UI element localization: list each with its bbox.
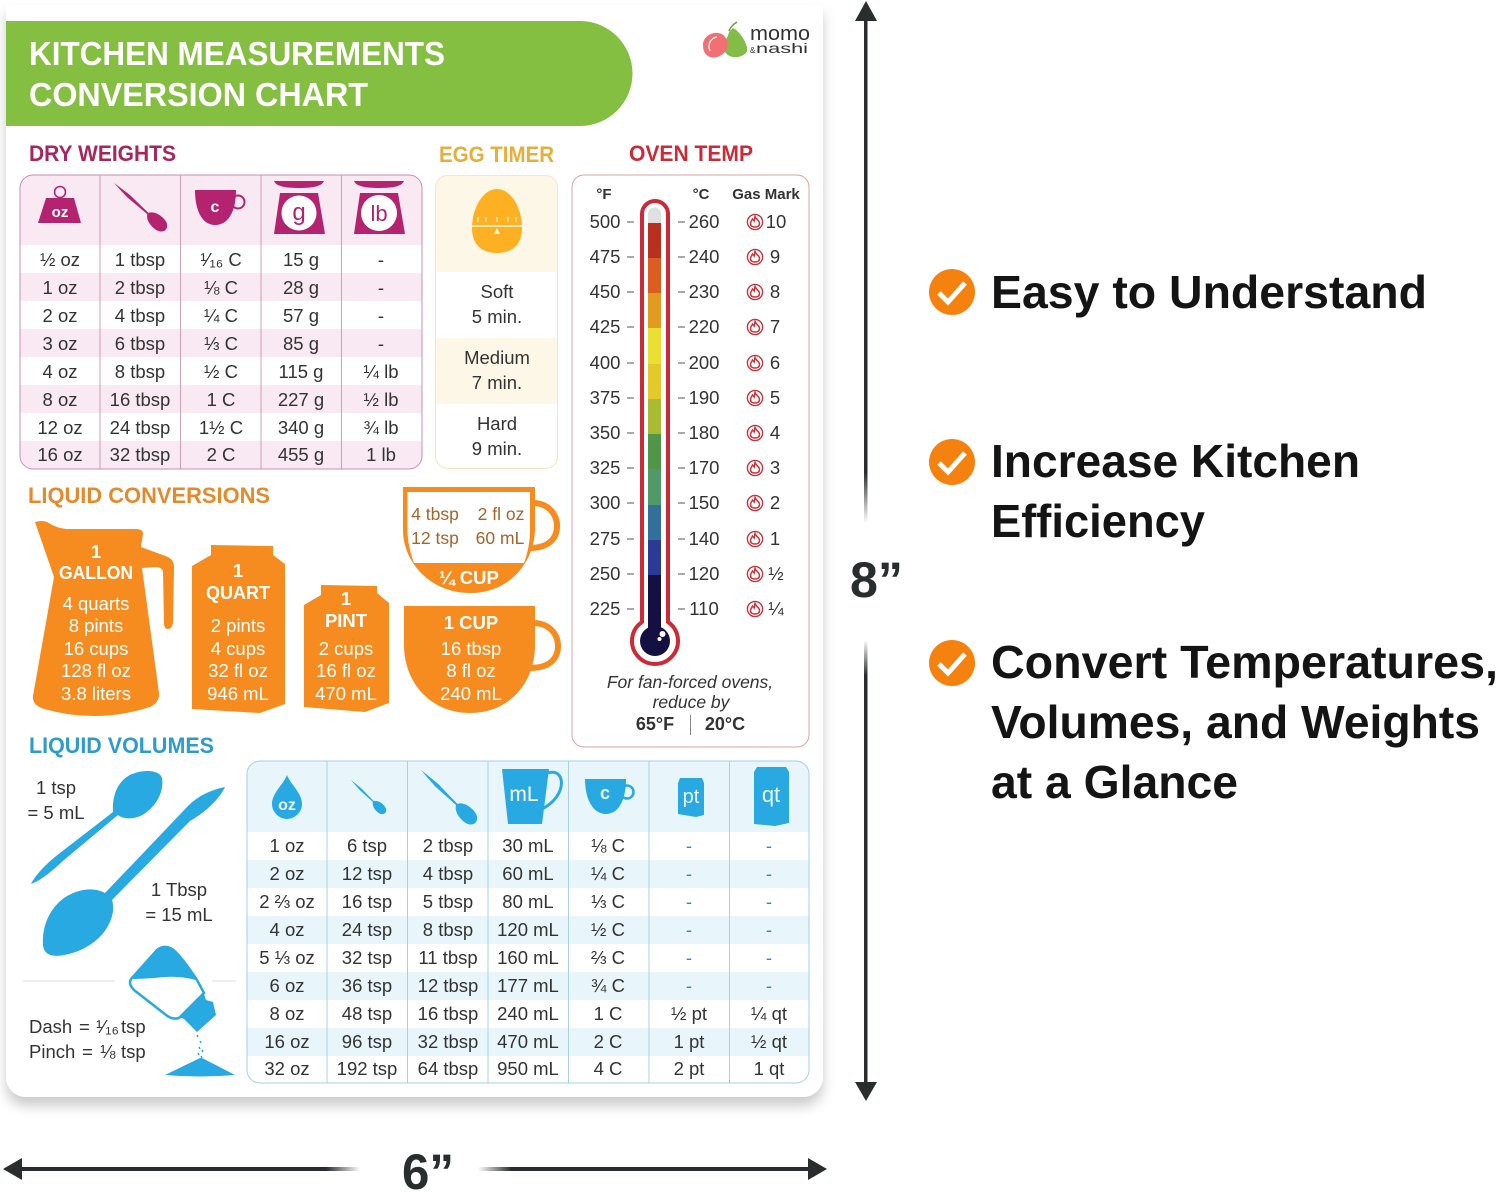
- dry weights values: -: [378, 249, 384, 270]
- gas mark values: ¼: [768, 598, 784, 619]
- carton: 1 pint: 16 fl oz: [316, 660, 376, 681]
- carton: 1 quart: QUART: [206, 582, 271, 603]
- dash and pinch labels: ¹⁄₁₆: [96, 1016, 119, 1037]
- carton: 1 quart: 4 cups: [211, 638, 265, 659]
- cup: 1 cup: 240 mL: [440, 683, 502, 704]
- liquid volumes values: 80 mL: [502, 891, 554, 912]
- dash and pinch labels: [29, 1016, 146, 1062]
- liquid volumes values: 177 mL: [497, 975, 559, 996]
- dry weights icons: lb: [370, 201, 388, 226]
- liquid volumes values: -: [686, 975, 692, 996]
- fan-forced note: reduce by: [653, 692, 731, 712]
- liquid volumes values: -: [766, 947, 772, 968]
- dry weights values: 8 oz: [43, 389, 77, 410]
- dash and pinch labels: =: [82, 1041, 93, 1062]
- carton: 1 quart: 946 mL: [207, 683, 269, 704]
- carton: 1 quart: [192, 545, 285, 713]
- celsius scale: 180: [689, 422, 719, 443]
- heading: liquid volumes: LIQUID VOLUMES: [29, 733, 214, 758]
- egg timer labels: Medium: [464, 347, 530, 368]
- jug: 1 gallon: [33, 521, 174, 716]
- gas mark values: 7: [770, 316, 780, 337]
- liquid volumes values: 2 C: [594, 1031, 622, 1052]
- gas mark values: 4: [770, 422, 780, 443]
- cup: quarter cup: 4 tbsp: [411, 504, 459, 524]
- fan-forced note: [607, 672, 773, 735]
- dry weights icons: [38, 178, 405, 235]
- gas mark values: 3: [770, 457, 780, 478]
- celsius scale: 170: [689, 457, 719, 478]
- liquid volumes values: 5 tbsp: [423, 891, 473, 912]
- gas mark values: 5: [770, 387, 780, 408]
- gas mark values: [766, 211, 786, 619]
- liquid volumes values: 4 C: [594, 1058, 622, 1079]
- liquid volumes values: 24 tsp: [342, 919, 392, 940]
- dry weights values: 24 tbsp: [110, 417, 170, 438]
- celsius scale: 220: [689, 316, 719, 337]
- title banner: [6, 21, 633, 126]
- liquid volumes values: 32 tbsp: [418, 1031, 478, 1052]
- liquid volumes values: 4 oz: [270, 919, 304, 940]
- cup: quarter cup: 2 fl oz: [478, 504, 524, 524]
- carton: 1 quart: 32 fl oz: [208, 660, 268, 681]
- liquid volumes values: 1 C: [594, 1003, 622, 1024]
- liquid volumes values: 60 mL: [502, 863, 554, 884]
- dry weights values: 1 lb: [366, 444, 396, 465]
- dash and pinch labels: tsp: [121, 1016, 146, 1037]
- fahrenheit scale: 325: [590, 457, 620, 478]
- fahrenheit scale: 300: [590, 492, 620, 513]
- gas mark values: 2: [770, 492, 780, 513]
- benefit: convert at a glance: Convert Temperatures,: [991, 636, 1498, 688]
- celsius scale: 140: [689, 528, 719, 549]
- dash and pinch labels: =: [79, 1016, 90, 1037]
- dry weights values: 1 C: [207, 389, 235, 410]
- liquid volumes values: 8 oz: [270, 1003, 304, 1024]
- jug: 1 gallon: 8 pints: [69, 615, 123, 636]
- dry weights values: [37, 249, 398, 465]
- heading: egg timer: EGG TIMER: [439, 142, 554, 167]
- liquid volumes values: -: [766, 891, 772, 912]
- arrow: width dimension: [3, 1158, 827, 1180]
- fahrenheit scale: 500: [590, 211, 620, 232]
- carton: 1 quart: 2 pints: [211, 615, 265, 636]
- gas mark values: 10: [766, 211, 786, 232]
- logo: momo and nashi: &: [750, 46, 756, 55]
- dry weights icons: oz: [52, 204, 68, 221]
- cup: quarter cup: 60 mL: [476, 528, 525, 548]
- dry weights values: 455 g: [278, 444, 324, 465]
- label: 1 Tbsp: = 15 mL: [145, 904, 213, 925]
- liquid volumes values: ½ pt: [671, 1003, 707, 1024]
- liquid volumes values: 16 oz: [264, 1031, 310, 1052]
- liquid volumes values: ½ qt: [751, 1031, 787, 1052]
- liquid volumes values: 16 tsp: [342, 891, 392, 912]
- gas mark icons: [747, 214, 763, 617]
- gas mark values: ½: [768, 563, 784, 584]
- dry weights values: 6 tbsp: [115, 333, 165, 354]
- dry weights values: ¹⁄₁₆ C: [200, 249, 242, 270]
- oven temp column labels: °C: [693, 186, 710, 203]
- dry weights values: ¼ C: [204, 305, 238, 326]
- liquid volumes values: 6 tsp: [347, 835, 387, 856]
- jug: 1 gallon: 1: [91, 541, 101, 562]
- fahrenheit scale: 225: [590, 598, 620, 619]
- oven temp column labels: °F: [596, 186, 612, 203]
- carton: 1 quart: 1: [233, 560, 243, 581]
- liquid volumes values: -: [686, 835, 692, 856]
- dash and pinch labels: tsp: [121, 1041, 146, 1062]
- liquid volumes values: 32 oz: [264, 1058, 310, 1079]
- liquid volumes values: 64 tbsp: [418, 1058, 478, 1079]
- liquid volumes values: 48 tsp: [342, 1003, 392, 1024]
- dry weights values: ¾ lb: [364, 417, 398, 438]
- icon: egg timer: [472, 189, 522, 253]
- liquid volumes values: 2 pt: [674, 1058, 704, 1079]
- liquid volumes icons: c: [600, 783, 610, 803]
- carton: 1 pint: 1: [341, 588, 351, 609]
- liquid volumes values: 12 tsp: [342, 863, 392, 884]
- icon: tablespoon: [43, 787, 225, 956]
- liquid volumes values: -: [686, 891, 692, 912]
- egg timer labels: 7 min.: [472, 372, 522, 393]
- jug: 1 gallon: 128 fl oz: [61, 660, 131, 681]
- liquid volumes values: [259, 835, 787, 1079]
- fan-forced note: 65°F: [636, 714, 674, 734]
- jug: 1 gallon: 16 cups: [64, 638, 128, 659]
- benefit: increase kitchen efficiency: Increase Kitchen: [991, 435, 1360, 487]
- carton: 1 pint: 2 cups: [319, 638, 373, 659]
- icon: salt shaker: [130, 947, 235, 1076]
- dry weights values: 1½ C: [199, 417, 243, 438]
- liquid volumes values: 2 oz: [270, 863, 304, 884]
- egg timer labels: Soft: [481, 281, 513, 302]
- liquid volumes values: -: [686, 919, 692, 940]
- gas mark values: 1: [770, 528, 780, 549]
- dry weights values: 2 tbsp: [115, 277, 165, 298]
- thermometer: [632, 201, 678, 664]
- liquid volumes values: -: [766, 863, 772, 884]
- liquid volumes values: 240 mL: [497, 1003, 559, 1024]
- liquid volumes icons: oz: [278, 797, 296, 814]
- dry weights icons: g: [292, 199, 306, 226]
- celsius scale: 150: [689, 492, 719, 513]
- gas mark values: 8: [770, 281, 780, 302]
- liquid volumes values: ⅓ C: [591, 891, 625, 912]
- title banner: KITCHEN MEASUREMENTS: [29, 35, 445, 72]
- liquid volumes values: 96 tsp: [342, 1031, 392, 1052]
- egg timer labels: Hard: [477, 413, 517, 434]
- cup: quarter cup: ¼ CUP: [439, 567, 499, 588]
- fahrenheit scale: 450: [590, 281, 620, 302]
- oven temp column labels: Gas Mark: [732, 186, 800, 203]
- fahrenheit scale: 400: [590, 352, 620, 373]
- celsius scale: 190: [689, 387, 719, 408]
- benefit: easy to understand: Easy to Understand: [991, 266, 1427, 318]
- benefit: convert at a glance: at a Glance: [991, 756, 1238, 808]
- dry weights values: ½ lb: [364, 389, 398, 410]
- dry weights values: -: [378, 305, 384, 326]
- gas mark values: 6: [770, 352, 780, 373]
- arrow: height dimension: [855, 1, 877, 1101]
- heading: liquid conversions: LIQUID CONVERSIONS: [28, 483, 270, 508]
- dry weights values: -: [378, 277, 384, 298]
- liquid volumes values: 470 mL: [497, 1031, 559, 1052]
- egg timer labels: 5 min.: [472, 306, 522, 327]
- dry weights values: -: [378, 333, 384, 354]
- liquid volumes values: 8 tbsp: [423, 919, 473, 940]
- liquid volumes values: 950 mL: [497, 1058, 559, 1079]
- liquid volumes values: ¼ C: [591, 863, 625, 884]
- icon: teaspoon: [31, 771, 162, 884]
- logo: momo and nashi: nashi: [756, 40, 808, 56]
- dash and pinch labels: Pinch: [29, 1041, 75, 1062]
- dry weights values: ¼ lb: [364, 361, 398, 382]
- liquid volumes values: 1 pt: [674, 1031, 704, 1052]
- dry weights values: 1 oz: [43, 277, 77, 298]
- heading: dry weights: DRY WEIGHTS: [29, 141, 176, 166]
- dry weights values: ½ C: [204, 361, 238, 382]
- dry weights icons: c: [211, 199, 220, 216]
- panel: egg timer: [435, 175, 558, 468]
- liquid volumes values: 6 oz: [270, 975, 304, 996]
- celsius scale: 120: [689, 563, 719, 584]
- celsius scale: 230: [689, 281, 719, 302]
- dry weights values: 32 tbsp: [110, 444, 170, 465]
- cup: 1 cup: 1 CUP: [444, 612, 498, 633]
- fan-forced note: 20°C: [705, 714, 745, 734]
- dry weights values: 2 C: [207, 444, 235, 465]
- logo: momo and nashi: momo: [750, 23, 810, 45]
- fahrenheit scale: 250: [590, 563, 620, 584]
- dry weights values: 85 g: [283, 333, 319, 354]
- title banner: CONVERSION CHART: [29, 76, 368, 113]
- liquid volumes values: -: [766, 835, 772, 856]
- dry weights values: 57 g: [283, 305, 319, 326]
- liquid volumes values: 1 oz: [270, 835, 304, 856]
- dry weights values: 12 oz: [37, 417, 83, 438]
- fahrenheit scale: 275: [590, 528, 620, 549]
- celsius scale: 110: [689, 598, 719, 619]
- liquid volumes values: 16 tbsp: [418, 1003, 478, 1024]
- benefit: convert at a glance: Volumes, and Weights: [991, 696, 1480, 748]
- liquid volumes values: 120 mL: [497, 919, 559, 940]
- jug: 1 gallon: GALLON: [59, 562, 133, 583]
- cup: 1 cup: 16 tbsp: [441, 638, 501, 659]
- label: 1 tsp: 1 tsp: [36, 777, 76, 798]
- fahrenheit scale: [590, 211, 620, 619]
- liquid volumes values: ⅛ C: [591, 835, 625, 856]
- liquid volumes values: 1 qt: [754, 1058, 784, 1079]
- liquid volumes icons: [272, 765, 789, 828]
- liquid volumes values: ⅔ C: [591, 947, 625, 968]
- dry weights values: 1 tbsp: [115, 249, 165, 270]
- dry weights values: ⅓ C: [204, 333, 238, 354]
- liquid volumes values: ½ C: [591, 919, 625, 940]
- liquid volumes icons: pt: [683, 786, 700, 808]
- egg timer labels: 9 min.: [472, 438, 522, 459]
- liquid volumes values: -: [766, 919, 772, 940]
- liquid volumes values: ¼ qt: [751, 1003, 787, 1024]
- jug: 1 gallon: 3.8 liters: [61, 683, 131, 704]
- liquid volumes values: 32 tsp: [342, 947, 392, 968]
- dry weights values: 8 tbsp: [115, 361, 165, 382]
- liquid volumes values: 160 mL: [497, 947, 559, 968]
- dash and pinch labels: ⅛: [100, 1041, 116, 1062]
- dry weights values: 15 g: [283, 249, 319, 270]
- benefit: increase kitchen efficiency: [929, 435, 1360, 547]
- dry weights values: 340 g: [278, 417, 324, 438]
- liquid volumes values: -: [686, 947, 692, 968]
- liquid volumes values: 2 tbsp: [423, 835, 473, 856]
- logo: momo and nashi: [703, 22, 810, 58]
- fahrenheit scale: 375: [590, 387, 620, 408]
- liquid volumes icons: mL: [509, 783, 539, 806]
- dry weights values: ½ oz: [40, 249, 80, 270]
- liquid volumes values: 12 tbsp: [418, 975, 478, 996]
- dry weights values: 115 g: [279, 361, 323, 382]
- celsius scale: 200: [689, 352, 719, 373]
- label: 1 Tbsp: 1 Tbsp: [151, 879, 207, 900]
- dry weights values: 227 g: [278, 389, 324, 410]
- celsius scale: 260: [689, 211, 719, 232]
- liquid volumes values: ¾ C: [591, 975, 625, 996]
- liquid volumes values: 2 ⅔ oz: [259, 891, 315, 912]
- label: 1 tsp: [27, 777, 85, 823]
- liquid volumes values: -: [766, 975, 772, 996]
- height label: 8”: [850, 552, 903, 608]
- jug: 1 gallon: 4 quarts: [63, 593, 129, 614]
- liquid volumes values: -: [686, 863, 692, 884]
- label: 1 tsp: = 5 mL: [27, 802, 85, 823]
- liquid volumes values: 36 tsp: [342, 975, 392, 996]
- cup: 1 cup: 8 fl oz: [446, 660, 496, 681]
- liquid volumes values: 11 tbsp: [418, 947, 478, 968]
- cup: quarter cup: [403, 487, 557, 593]
- gas mark values: 9: [770, 246, 780, 267]
- liquid volumes values: 30 mL: [502, 835, 554, 856]
- dry weights values: 16 tbsp: [110, 389, 170, 410]
- dry weights values: 3 oz: [43, 333, 77, 354]
- panel: liquid volumes table: [247, 761, 809, 1083]
- cup: 1 cup: [404, 606, 558, 713]
- carton: 1 pint: [304, 585, 389, 712]
- celsius scale: 240: [689, 246, 719, 267]
- fahrenheit scale: 425: [590, 316, 620, 337]
- carton: 1 pint: 470 mL: [315, 683, 377, 704]
- fahrenheit scale: 475: [590, 246, 620, 267]
- oven temp column labels: [596, 186, 800, 203]
- dry weights values: 4 tbsp: [115, 305, 165, 326]
- dry weights values: 2 oz: [43, 305, 77, 326]
- heading: oven temp: OVEN TEMP: [629, 141, 753, 166]
- celsius scale: [689, 211, 719, 619]
- carton: 1 pint: PINT: [325, 610, 368, 631]
- benefit: increase kitchen efficiency: Efficiency: [991, 495, 1205, 547]
- fahrenheit scale: 350: [590, 422, 620, 443]
- liquid volumes values: 192 tsp: [337, 1058, 397, 1079]
- panel: oven temp: [572, 175, 809, 747]
- liquid volumes values: 4 tbsp: [423, 863, 473, 884]
- label: 1 Tbsp: [145, 879, 213, 925]
- dry weights values: 16 oz: [37, 444, 83, 465]
- benefit: convert at a glance: [929, 636, 1498, 808]
- white card: [6, 5, 823, 1097]
- dry weights values: 28 g: [283, 277, 319, 298]
- dry weights values: 4 oz: [43, 361, 77, 382]
- liquid volumes values: 5 ⅓ oz: [259, 947, 315, 968]
- liquid volumes icons: qt: [762, 782, 780, 807]
- cup: quarter cup: 12 tsp: [411, 528, 459, 548]
- panel: dry weights table: [20, 175, 422, 469]
- dash and pinch labels: Dash: [29, 1016, 72, 1037]
- dry weights values: ⅛ C: [204, 277, 238, 298]
- egg timer labels: [464, 281, 530, 459]
- fan-forced note: For fan-forced ovens,: [607, 672, 773, 692]
